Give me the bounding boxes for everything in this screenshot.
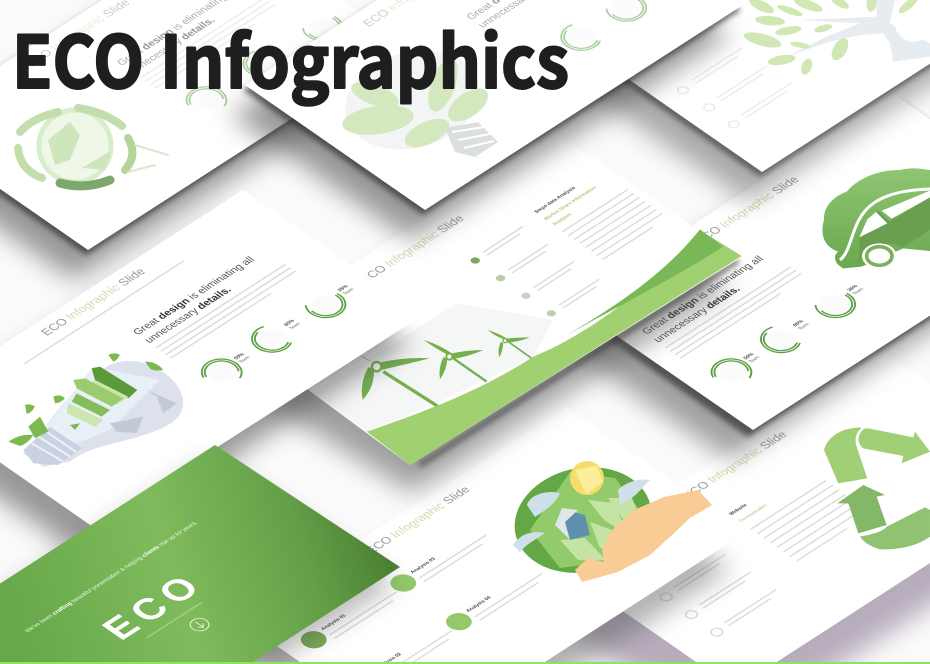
bottom accent line — [0, 662, 930, 664]
feature list — [469, 226, 605, 318]
panel: globe bulb slide — [0, 190, 423, 555]
tree slide list — [676, 48, 799, 130]
earth slide heading — [115, 0, 280, 89]
data analysis column: Analysis — [551, 212, 573, 227]
panel: earth slide — [0, 0, 406, 280]
heading: unnecessary details. — [652, 285, 743, 344]
hand slide title: ECO Infographic Slide — [362, 484, 474, 556]
analysis item 01 — [296, 583, 401, 652]
earth slide heading: unnecessary details. — [127, 16, 218, 76]
bulb slide heading — [465, 0, 602, 30]
heading — [131, 247, 300, 358]
title: ECO — [12, 4, 144, 109]
illustration: tree — [742, 0, 930, 76]
panel: wind turbine slide — [222, 133, 742, 493]
illustration: wind turbines and swoosh — [313, 229, 742, 465]
recycle slide body text — [728, 465, 872, 561]
panel: green ECO cover slide — [0, 445, 400, 664]
progress ring 65%: 65% — [792, 319, 806, 328]
cover heading: ECO — [94, 567, 215, 647]
earth slide rings — [169, 2, 357, 125]
analysis item 02 — [351, 621, 457, 664]
progress ring 65% — [742, 309, 826, 365]
heading — [640, 249, 806, 358]
recycle slide list — [658, 554, 784, 638]
progress ring 35% — [803, 276, 877, 326]
analysis item 03: Analysis 03 — [409, 557, 437, 575]
illustration: globe in hand — [505, 455, 712, 585]
progress ring 65%: Team — [797, 322, 810, 331]
car slide title: ECO Infographic Slide — [691, 174, 803, 246]
progress ring 35%: 35% — [846, 284, 860, 293]
heading: Great design is eliminating all — [131, 255, 257, 337]
illustration: earth ring — [18, 108, 168, 186]
analysis item 01: Analysis 01 — [320, 613, 348, 632]
data analysis column: Steps data Analysis — [533, 186, 578, 215]
progress ring 35%: Team — [851, 287, 865, 296]
progress ring 35%: 35% — [337, 284, 350, 293]
progress ring 50%: Team — [747, 355, 761, 364]
progress ring 65%: Team — [288, 321, 301, 330]
icon: recycle arrows — [824, 427, 930, 549]
data analysis column: Market Share Information — [543, 185, 598, 221]
progress ring 65% — [234, 309, 317, 365]
heading: unnecessary details. — [143, 286, 234, 345]
panel: tree slide — [568, 0, 930, 202]
recycle slide body text: Communication — [738, 503, 768, 523]
wind slide title: ECO Infographic Slide — [357, 213, 468, 285]
analysis item 04: Analysis 04 — [465, 595, 493, 614]
illustration: leaf bulb — [334, 36, 498, 164]
illustration: globe light bulb with city — [8, 353, 183, 467]
title: Infographics — [160, 4, 569, 109]
illustration: green car and tree — [822, 168, 930, 269]
bulb slide rings — [543, 0, 662, 63]
recycle slide body text: Website — [728, 503, 749, 517]
analysis item 04 — [441, 565, 547, 634]
panel: hand slide — [232, 407, 746, 664]
heading: Great design is eliminating all — [640, 255, 766, 336]
cover subtext — [146, 603, 202, 638]
panel: recycle slide — [545, 352, 930, 664]
data analysis column — [533, 169, 668, 259]
cover tagline: We've been crafting beautiful presentation & helping clients rise up for years. — [24, 520, 200, 634]
progress ring 65%: 65% — [283, 318, 297, 327]
progress ring 50%: 50% — [742, 352, 756, 361]
analysis item 03 — [385, 526, 491, 595]
panel: light bulb leaves slide — [231, 0, 743, 240]
recycle slide title: ECO Infographic Slide — [679, 429, 791, 501]
progress ring 50%: Team — [238, 355, 251, 364]
panel: car slide — [550, 93, 930, 460]
bulb globe slide title: ECO Infographic Slide — [38, 266, 149, 338]
progress ring 35%: Team — [341, 287, 355, 296]
icon: arrow circle — [186, 616, 213, 634]
subtitle — [24, 261, 184, 364]
progress ring 50% — [186, 343, 266, 396]
progress ring 35% — [293, 276, 368, 326]
progress ring 50%: 50% — [233, 352, 246, 361]
progress ring 50% — [695, 343, 775, 396]
title — [12, 4, 569, 109]
